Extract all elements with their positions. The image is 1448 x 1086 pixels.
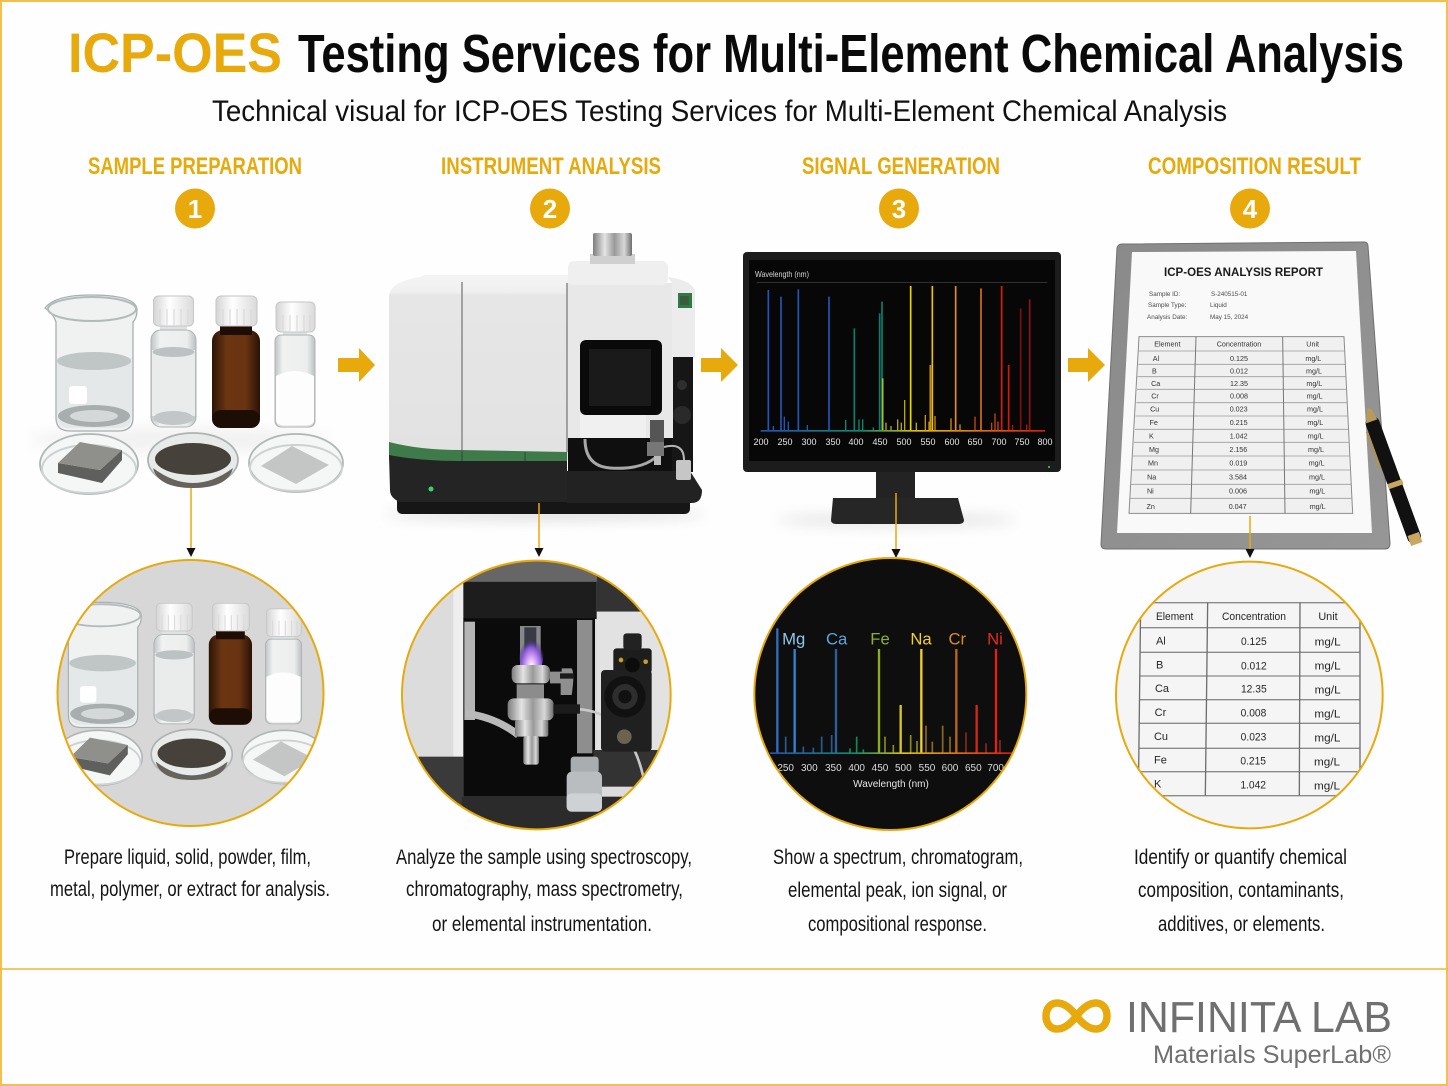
- caption: sample preparation: metal, polymer, or extract for analysis.: [50, 878, 330, 901]
- detail circle: results table: Ca: [1155, 683, 1170, 695]
- report data table: mg/L: [1309, 460, 1325, 468]
- caption: sample preparation: Prepare liquid, solid, powder, film,: [64, 846, 311, 869]
- caption: composition result: Identify or quantify chemical: [1134, 846, 1347, 869]
- report data table: mg/L: [1306, 380, 1322, 388]
- report data table: mg/L: [1305, 355, 1321, 363]
- report data table: Cr: [1151, 393, 1159, 401]
- detail circle: results table: 0.012: [1241, 660, 1267, 672]
- detail circle: results table: Element: [1156, 611, 1193, 623]
- footer divider: [0, 968, 1448, 970]
- report data table: mg/L: [1309, 474, 1325, 482]
- logo: Infinita Lab: [1046, 993, 1392, 1069]
- wavelength ticks: 650: [965, 763, 982, 774]
- report data table: Element: [1154, 341, 1180, 349]
- wavelength ticks: 300: [801, 763, 818, 774]
- screen wavelength ticks: 250: [777, 437, 793, 447]
- report data table: 12.35: [1230, 380, 1248, 388]
- wavelength ticks: 550: [919, 763, 936, 774]
- axis title: Wavelength (nm): [853, 779, 929, 790]
- report data table: mg/L: [1308, 432, 1324, 440]
- badge 4: 4: [1243, 194, 1258, 224]
- report title: ICP-OES ANALYSIS REPORT: [1164, 267, 1323, 279]
- heading: instrument analysis: INSTRUMENT ANALYSIS: [441, 153, 661, 180]
- detail circle: results table: 12.35: [1241, 684, 1267, 696]
- caption: instrument analysis: Analyze the sample using spectroscopy,: [396, 846, 692, 869]
- caption: composition result: composition, contaminants,: [1138, 879, 1344, 902]
- detail circle: results table: 0.023: [1241, 732, 1266, 744]
- caption: instrument analysis: chromatography, mass spectrometry,: [406, 878, 683, 901]
- icon: infinity mark: [1046, 1003, 1107, 1029]
- caption: instrument analysis: or elemental instrumentation.: [432, 913, 652, 936]
- wavelength ticks: 450: [872, 763, 889, 774]
- report data table: 0.008: [1230, 393, 1248, 401]
- report data table: mg/L: [1308, 446, 1324, 454]
- badge 2: 2: [543, 194, 557, 224]
- badge 3: [879, 188, 919, 228]
- screen wavelength ticks: 400: [848, 437, 864, 447]
- report data table: mg/L: [1307, 419, 1323, 427]
- report data table: Mg: [1149, 446, 1159, 454]
- connector arrow: report to detail: [1246, 516, 1254, 558]
- detail circle: results table: Fe: [1154, 755, 1167, 767]
- report data table: mg/L: [1307, 406, 1323, 414]
- detail circle: results table: mg/L: [1315, 684, 1341, 696]
- connector arrow: instrument to detail: [534, 503, 544, 557]
- detail circle: results table: 1.042: [1240, 779, 1266, 791]
- badge 2: [530, 188, 570, 228]
- report data table: mg/L: [1307, 393, 1323, 401]
- detail circle: results table: mg/L: [1315, 661, 1341, 673]
- heading: signal generation: SIGNAL GENERATION: [802, 153, 1000, 180]
- report data table: Ca: [1151, 380, 1160, 388]
- screen wavelength ticks: 600: [944, 437, 960, 447]
- report metadata: Sample Type:: [1148, 302, 1187, 309]
- detail circle: results table: mg/L: [1314, 780, 1340, 792]
- screen wavelength ticks: 800: [1037, 437, 1053, 447]
- wavelength ticks: 350: [825, 763, 842, 774]
- wavelength ticks: 400: [848, 763, 865, 774]
- report data table: K: [1149, 432, 1154, 440]
- report metadata: S-240515-01: [1211, 291, 1248, 298]
- step headings: [88, 153, 1361, 180]
- heading: sample preparation: SAMPLE PREPARATION: [88, 153, 302, 180]
- report data table: 1.042: [1230, 432, 1248, 440]
- screen wavelength ticks: 500: [896, 437, 912, 447]
- detail circle: results table: 0.008: [1241, 708, 1266, 720]
- detail circle: results table: mg/L: [1314, 708, 1340, 720]
- tagline: Materials SuperLab®: [1153, 1041, 1392, 1069]
- element labels: Cr: [949, 629, 967, 648]
- report metadata: Sample ID:: [1149, 291, 1180, 298]
- detail circle: torch close-up: [395, 550, 680, 835]
- screen wavelength ticks: [753, 437, 1053, 447]
- pen: [1366, 408, 1421, 541]
- step number badges: [175, 188, 1270, 228]
- image: ICP-OES instrument: [385, 233, 705, 520]
- wavelength ticks: 250: [777, 763, 794, 774]
- flow arrow: step 2 to 3: [701, 348, 738, 382]
- subtitle: Technical visual for ICP-OES Testing Services for Multi-Element Chemical Analysis: [212, 95, 1227, 128]
- element labels: Na: [910, 629, 932, 648]
- report metadata: Liquid: [1210, 302, 1227, 309]
- badge 1: [175, 188, 215, 228]
- caption: composition result: [1134, 846, 1347, 936]
- caption: signal generation: compositional response.: [808, 913, 987, 936]
- caption: sample preparation: [50, 846, 330, 901]
- screen wavelength ticks: 200: [753, 437, 769, 447]
- report data table: 0.125: [1230, 355, 1248, 363]
- report data table: [1129, 337, 1421, 541]
- report metadata: Analysis Date:: [1147, 314, 1187, 321]
- detail circle: results table: Unit: [1318, 611, 1338, 623]
- caption: signal generation: Show a spectrum, chromatogram,: [773, 846, 1023, 869]
- report data table: 0.012: [1230, 367, 1248, 375]
- detail circle: results table: Cu: [1154, 731, 1168, 743]
- report data table: B: [1152, 367, 1157, 375]
- detail circle: results table: Concentration: [1222, 611, 1286, 623]
- caption: signal generation: elemental peak, ion signal, or: [788, 879, 1007, 902]
- image: clipboard report and pen: [1101, 242, 1421, 549]
- caption: signal generation: [773, 846, 1023, 936]
- report data table: Concentration: [1217, 341, 1261, 349]
- element labels: Fe: [870, 629, 890, 648]
- element labels: Mg: [782, 629, 805, 648]
- report data table: 2.156: [1229, 446, 1247, 454]
- wordmark: INFINITA LAB: [1126, 993, 1392, 1042]
- detail circle: results table: mg/L: [1314, 756, 1340, 768]
- screen wavelength ticks: 350: [825, 437, 841, 447]
- detail circle: results table: K: [1154, 779, 1162, 791]
- element labels: Ni: [987, 629, 1003, 648]
- flow arrow: step 1 to 2: [338, 348, 375, 382]
- detail circle: results table: [1116, 562, 1383, 828]
- report data table: 0.023: [1230, 406, 1248, 414]
- detail circle: samples close-up: [56, 559, 324, 827]
- wavelength ticks: 600: [942, 763, 959, 774]
- screen wavelength ticks: 700: [991, 437, 1007, 447]
- screen wavelength ticks: 300: [801, 437, 817, 447]
- report data table: Zn: [1146, 503, 1155, 511]
- wavelength ticks: 500: [895, 763, 912, 774]
- report data table: Unit: [1306, 341, 1319, 349]
- report data table: mg/L: [1306, 367, 1322, 375]
- caption: instrument analysis: [396, 846, 692, 936]
- report data table: 0.006: [1229, 488, 1247, 496]
- report data table: Ni: [1147, 488, 1154, 496]
- report data table: Al: [1153, 355, 1160, 363]
- badge 3: 3: [892, 194, 906, 224]
- element labels: Ca: [826, 629, 848, 648]
- screen wavelength ticks: 450: [872, 437, 888, 447]
- detail circle: results table: 0.125: [1241, 636, 1267, 648]
- report data table: Mn: [1148, 460, 1158, 468]
- screen wavelength ticks: 750: [1014, 437, 1030, 447]
- element labels: [782, 629, 1003, 648]
- report data table: 3.584: [1229, 474, 1247, 482]
- report metadata: May 15, 2024: [1210, 314, 1249, 321]
- wavelength ticks: 700: [987, 763, 1004, 774]
- screen wavelength ticks: 650: [967, 437, 983, 447]
- flow arrow: step 3 to 4: [1068, 348, 1105, 382]
- screen wavelength ticks: 550: [920, 437, 936, 447]
- report data table: Cu: [1150, 406, 1159, 414]
- report data table: Fe: [1149, 419, 1158, 427]
- wavelength ticks: [777, 763, 1004, 774]
- connector arrow: samples to detail: [186, 488, 196, 557]
- badge 1: 1: [188, 194, 202, 224]
- title: ICP-OES: [68, 21, 282, 84]
- detail circle: results table: Cr: [1155, 707, 1167, 719]
- screen axis title: Wavelength (nm): [755, 269, 809, 279]
- report data table: 0.047: [1229, 503, 1247, 511]
- report data table: Na: [1147, 474, 1156, 482]
- detail circle: results table: 0.215: [1240, 755, 1266, 767]
- report data table: 0.019: [1229, 460, 1247, 468]
- report data table: mg/L: [1310, 503, 1326, 511]
- detail circle: results table: B: [1156, 659, 1163, 671]
- detail circle: results table: Al: [1156, 635, 1166, 647]
- report data table: 0.215: [1230, 419, 1248, 427]
- report data table: mg/L: [1309, 488, 1325, 496]
- badge 4: [1230, 188, 1270, 228]
- image: monitor with emission spectrum: [743, 252, 1061, 526]
- heading: composition result: COMPOSITION RESULT: [1148, 153, 1361, 180]
- detail circle: results table: mg/L: [1314, 732, 1340, 744]
- report metadata: [1147, 291, 1249, 321]
- detail circle: labelled spectrum: [750, 555, 1035, 835]
- caption: composition result: additives, or elements.: [1158, 913, 1325, 936]
- connector arrow: monitor to detail: [892, 493, 900, 558]
- detail circle: results table: mg/L: [1315, 637, 1341, 649]
- image: sample containers and dishes: [30, 295, 343, 494]
